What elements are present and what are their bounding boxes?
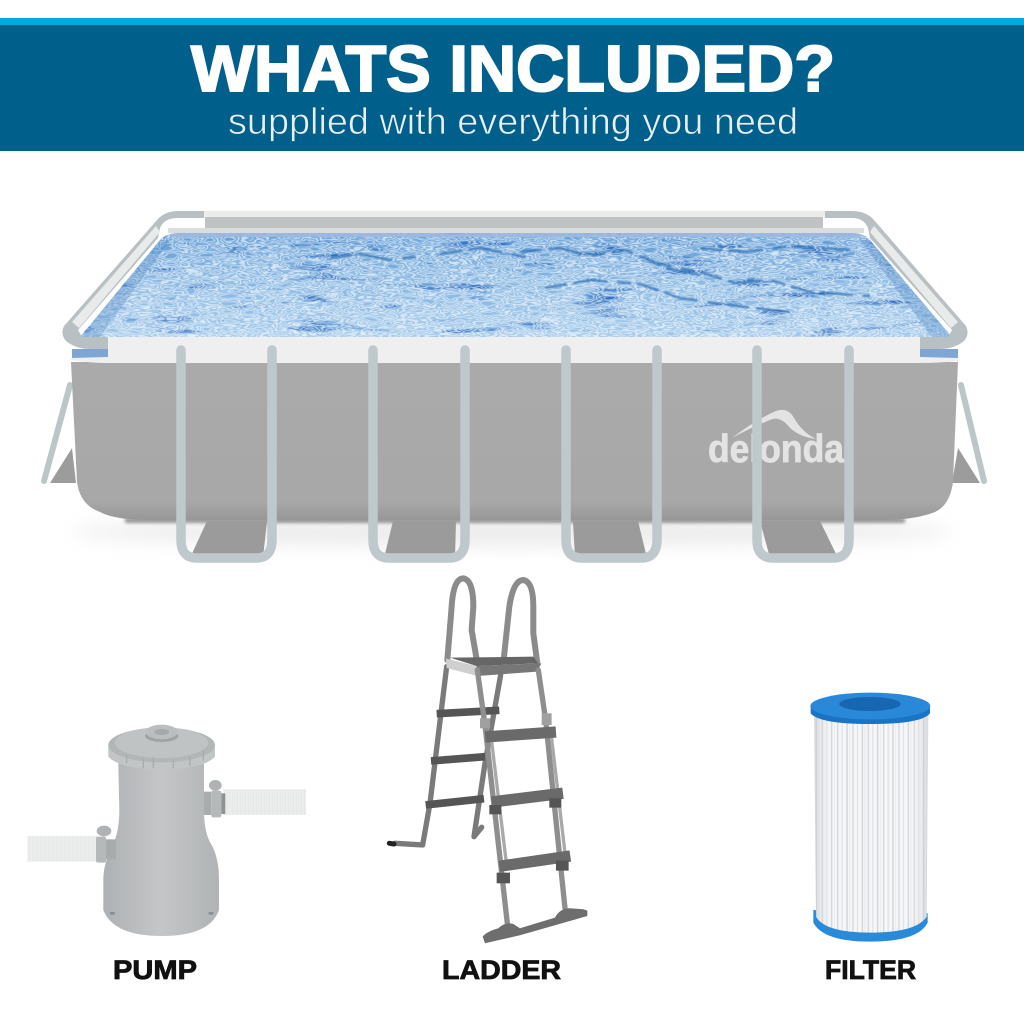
- corner rail: left: [62, 211, 204, 349]
- pump body: [103, 763, 219, 936]
- rear steps: [426, 710, 499, 805]
- handrail: left: [447, 578, 477, 663]
- front white rim: [71, 337, 958, 363]
- leg frame 2: [373, 350, 465, 558]
- accent stripe: [0, 18, 1024, 25]
- ground shadow: [72, 518, 952, 546]
- pump lid: [108, 725, 215, 769]
- logo: delonda: [708, 410, 844, 471]
- banner background: [0, 25, 1024, 151]
- handrail: right: [504, 580, 537, 663]
- rear legs: [395, 667, 501, 845]
- connector: left: [96, 826, 116, 863]
- contact shadow: [125, 518, 905, 523]
- foot strap 3: [573, 521, 647, 558]
- ladder illustration: [389, 578, 587, 943]
- side support: left: [44, 385, 76, 483]
- leg frame 3: [566, 350, 657, 558]
- header banner: [0, 18, 1024, 151]
- ladder base: [483, 908, 587, 943]
- connector: right: [204, 780, 225, 817]
- label: filter: FILTER: [825, 955, 916, 985]
- foot end cap: [389, 836, 394, 851]
- label: ladder: LADDER: [442, 955, 561, 985]
- pump illustration: [27, 725, 306, 936]
- filter bottom ring: [813, 910, 928, 942]
- mounting tabs: [110, 912, 213, 915]
- pool wall: [71, 362, 958, 520]
- pleated cartridge: [814, 713, 928, 933]
- corner rail: right: [825, 211, 968, 349]
- hose: right: [223, 789, 306, 815]
- leg frame 1: [181, 350, 272, 558]
- filter top cap: [810, 693, 930, 724]
- cartridge side shading: [814, 713, 928, 933]
- front legs: [477, 670, 565, 923]
- subtitle: supplied with everything you need: [228, 101, 798, 142]
- side support: right: [952, 385, 984, 483]
- platform: [446, 657, 541, 676]
- pool illustration: [44, 211, 984, 558]
- foot strap 2: [384, 521, 456, 558]
- back top rail: [168, 211, 864, 233]
- window corners: water behind rim: [72, 349, 958, 358]
- label: pump: PUMP: [113, 955, 197, 985]
- hose: left: [27, 836, 97, 862]
- clamps: [480, 713, 569, 883]
- logo: delonda: delonda: [708, 428, 844, 471]
- foot strap 4: [760, 521, 838, 558]
- foot strap 1: [190, 521, 267, 558]
- filter illustration: [810, 693, 930, 942]
- title: WHATS INCLUDED?: [191, 32, 835, 105]
- front leg inner rails: [491, 730, 565, 860]
- water surface: [70, 230, 960, 340]
- leg frame 4: [757, 350, 849, 558]
- front steps: [485, 732, 570, 866]
